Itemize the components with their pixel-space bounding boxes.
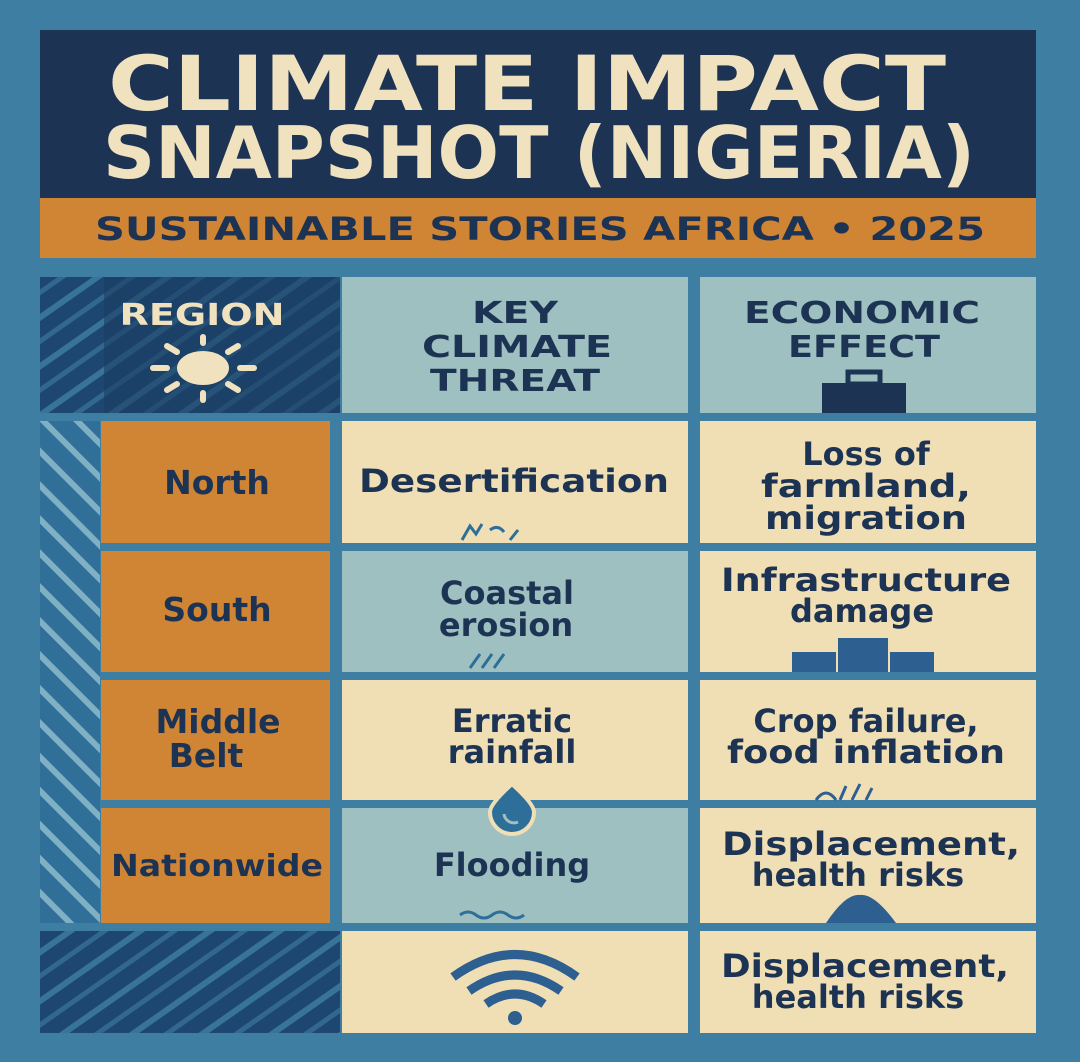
row: Nationwide: Nationwide [111, 849, 323, 884]
row: Middle Belt: Middle [155, 702, 281, 741]
header: key climate threat: KEY [472, 296, 560, 331]
header: economic effect: ECONOMIC [744, 296, 980, 331]
header: economic effect [700, 277, 1036, 413]
icon: briefcase [822, 372, 906, 413]
subtitle band: SUSTAINABLE STORIES AFRICA • 2025 [95, 210, 985, 248]
header: region [40, 277, 340, 413]
row: Middle Belt: rainfall [448, 733, 576, 771]
row: Nationwide: Flooding [434, 846, 590, 884]
row: North: North [164, 463, 270, 502]
header: key climate threat: THREAT [430, 364, 601, 399]
row: Middle Belt: food inflation [727, 733, 1005, 771]
left pattern strip [40, 421, 340, 1033]
row: Middle Belt: Crop failure, [753, 702, 979, 740]
header: key climate threat: CLIMATE [422, 330, 612, 365]
row: Middle Belt [101, 680, 1036, 800]
row: South: damage [790, 592, 934, 630]
row: South: Coastal [440, 574, 574, 612]
row: South: erosion [439, 606, 573, 644]
icon: buildings [792, 638, 934, 672]
row: North: migration [765, 499, 967, 537]
row: bottom [342, 931, 1036, 1033]
header: key climate threat [342, 277, 688, 413]
row: South: Infrastructure [721, 561, 1011, 599]
row: North: farmland, [761, 467, 971, 505]
row: North: Desertification [359, 462, 669, 500]
row: Middle Belt: Belt [169, 736, 244, 775]
row: Middle Belt: Erratic [452, 702, 572, 740]
row: North [101, 421, 1036, 543]
title panel [40, 30, 1036, 198]
icon: water drop [490, 784, 534, 834]
header: economic effect: EFFECT [788, 330, 941, 365]
row: bottom: Displacement, [721, 947, 1009, 985]
subtitle band [40, 198, 1036, 258]
icon: wifi [453, 954, 577, 1025]
title panel: SNAPSHOT (NIGERIA) [103, 111, 975, 195]
icon: sun [153, 337, 254, 400]
row: Nationwide [101, 808, 1036, 923]
row: South [101, 551, 1036, 672]
row: Nationwide: Displacement, [722, 825, 1020, 863]
row: South: South [162, 590, 272, 629]
header: region: REGION [120, 298, 284, 333]
row: North: Loss of [802, 435, 931, 473]
row: Nationwide: health risks [752, 856, 964, 894]
row: bottom: health risks [752, 978, 964, 1016]
title panel: CLIMATE IMPACT [108, 39, 946, 128]
